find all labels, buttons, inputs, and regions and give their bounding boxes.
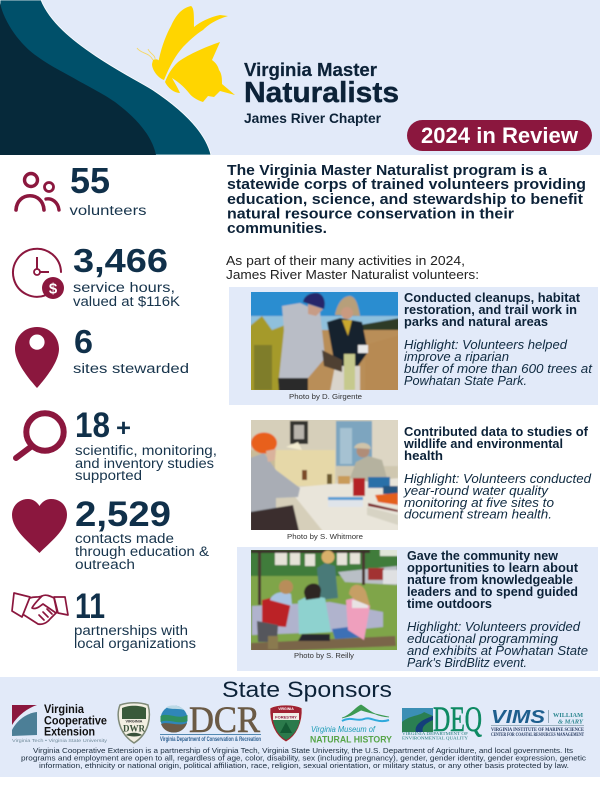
logo: Virginia Cooperative Extension: Extension: [44, 724, 95, 738]
intro paragraph: The Virginia Master Naturalist program is a: [227, 163, 548, 179]
icon: heart: [12, 499, 67, 553]
stat: scientific studies: scientific, monitoring,: [75, 443, 217, 458]
stat: contacts: contacts made: [75, 531, 174, 546]
activities lead-in text: As part of their many activities in 2024,: [226, 254, 465, 268]
highlight: Highlight: Volunteers provided: [407, 619, 581, 634]
logo: Virginia DWR: DWR: [123, 724, 145, 734]
logo: DEQ: DEQ: [433, 699, 482, 739]
highlight: Highlight: Volunteers helped: [404, 337, 568, 352]
stat: scientific studies: and inventory studies: [75, 456, 214, 471]
highlight: [404, 337, 593, 388]
stat: sites stewarded: [15, 323, 189, 388]
logo: VIMS William & Mary: VIMS: [491, 707, 545, 727]
icon: handshake: [12, 593, 68, 624]
photo: children at table: [251, 550, 397, 650]
stat: volunteers: [16, 160, 147, 218]
teal wave: [0, 0, 211, 155]
stat: volunteers: volunteers: [70, 203, 147, 218]
panel: data contribution: [245, 414, 592, 541]
logo: VIMS William & Mary: WILLIAM: [553, 712, 583, 719]
logo: Virginia Forestry: FORESTRY: [275, 714, 297, 720]
heading: Gave the community new: [407, 548, 558, 563]
intro paragraph: education, science, and stewardship to benefit: [227, 192, 583, 208]
stat: scientific studies: supported: [75, 468, 142, 483]
intro paragraph: statewide corps of trained volunteers providing: [227, 177, 586, 193]
activities lead-in text: James River Master Naturalist volunteers:: [226, 268, 479, 282]
subtitle: chapter: James River Chapter: [244, 111, 382, 126]
logo: VIMS William & Mary: & MARY: [558, 718, 584, 726]
stat: sites stewarded: sites stewarded: [73, 361, 189, 376]
highlight: and exhibits at Powhatan State: [407, 643, 588, 658]
highlight: Highlight: Volunteers conducted: [404, 471, 592, 486]
title: Naturalists: Naturalists: [244, 77, 399, 109]
title: Virginia Master: Virginia Master: [244, 60, 377, 80]
header banner: [0, 0, 600, 155]
highlight: [407, 619, 588, 670]
stat: contacts: through education &: [75, 544, 209, 559]
stat: contacts: 2,529: [75, 495, 171, 534]
logo: DEQ: ENVIRONMENTAL QUALITY: [402, 736, 468, 740]
heading: nature from knowledgeable: [407, 572, 573, 587]
stat: scientific studies: +: [116, 415, 131, 442]
highlight: buffer of more than 600 trees at: [404, 361, 593, 376]
logo: VIMS William & Mary: VIRGINIA INSTITUTE OF MARINE SCIENCE: [491, 728, 584, 733]
heading: Conducted cleanups, habitat: [404, 290, 581, 305]
stat: service hours: [13, 242, 180, 309]
panel: community: [237, 544, 598, 671]
photo: tree planting: [251, 292, 398, 390]
activities lead-in text: [226, 254, 479, 282]
highlight: Park's BirdBlitz event.: [407, 655, 527, 670]
disclaimer: information, ethnicity or national origin, political affiliation, race, religion, sexual orientation, or military status, or any other basis protected by law.: [39, 761, 569, 770]
logo: Virginia Cooperative Extension: Virginia Tech • Virginia State University: [12, 738, 108, 744]
intro paragraph: [227, 163, 586, 237]
disclaimer: [21, 746, 586, 770]
panel: cleanups: [229, 286, 598, 405]
stat: scientific studies: 18: [75, 406, 110, 445]
disclaimer: programs and employment are open to all, regardless of age, color, disability, sex (including pregnancy), gender, gender identity, gender expression, genetic: [21, 754, 586, 762]
logo: Virginia DWR: VIRGINIA: [126, 720, 143, 724]
stat: contacts: outreach: [75, 557, 135, 572]
intro paragraph: natural resource conservation in their: [227, 206, 514, 222]
heading: [407, 548, 579, 611]
stat: scientific studies: [16, 406, 217, 483]
highlight: educational programming: [407, 631, 559, 646]
footer: state sponsors: [0, 677, 600, 777]
heading: [404, 290, 581, 329]
heading: leaders and to spend guided: [407, 584, 578, 599]
logo: Virginia Forestry: [270, 705, 302, 742]
heading: parks and natural areas: [404, 314, 548, 329]
heading: restoration, and trail work in: [404, 302, 577, 317]
icon: map pin: [15, 327, 59, 388]
highlight: monitoring at five sites to: [404, 495, 554, 510]
heading: time outdoors: [407, 596, 492, 611]
icon: people: [16, 174, 59, 210]
stat: service hours: valued at $116K: [73, 294, 180, 309]
highlight: document stream health.: [404, 506, 552, 522]
logo: Virginia Cooperative Extension: Cooperative: [44, 714, 107, 728]
logo: DCR: Virginia Department of Conservation & Recreation: [160, 737, 261, 743]
icon: magnifying glass: [16, 413, 64, 458]
stat: sites stewarded: 6: [74, 323, 93, 360]
stat: service hours: 3,466: [73, 242, 168, 279]
dark wave: [0, 3, 156, 155]
logo: Virginia Forestry: VIRGINIA: [278, 707, 294, 711]
logo: Virginia Museum of Natural History: Virginia Museum of: [311, 724, 376, 734]
highlight: year-round water quality: [403, 483, 550, 498]
stat: partnerships: [12, 587, 196, 651]
badge: 2024 in Review: 2024 in Review: [421, 123, 579, 148]
heading: health: [404, 448, 443, 463]
photo: water testing: [251, 420, 398, 530]
logo: Virginia DWR: [118, 703, 149, 743]
logo: DEQ: VIRGINIA DEPARTMENT OF: [402, 731, 469, 736]
logo: DCR: [160, 700, 261, 743]
stat: volunteers: 55: [70, 160, 110, 201]
highlight: [403, 471, 592, 522]
logo: Virginia Cooperative Extension: Virginia: [44, 702, 84, 716]
heading: Contributed data to studies of: [404, 424, 589, 439]
caption: Photo by S. Reilly: [294, 651, 354, 660]
logo: DEQ: [402, 699, 482, 740]
badge: 2024 in Review: [407, 120, 592, 151]
caption: Photo by D. Girgente: [289, 392, 362, 401]
intro paragraph: communities.: [227, 221, 327, 237]
stat: partnerships: 11: [75, 587, 105, 626]
caption: Photo by S. Whitmore: [287, 532, 363, 541]
stat: service hours: service hours,: [73, 280, 175, 295]
disclaimer: Virginia Cooperative Extension is a partnership of Virginia Tech, Virginia State University, the U.S. Department of Agriculture, and local governments. Its: [33, 746, 573, 755]
icon: butterfly: [137, 6, 235, 102]
logo: Virginia Cooperative Extension: [12, 702, 108, 744]
heading: [403, 424, 589, 463]
icon: clock with dollar: $: [49, 280, 58, 298]
logo: Virginia Museum of Natural History: [310, 705, 392, 744]
logo: Virginia Museum of Natural History: NATURAL HISTORY: [310, 734, 392, 744]
stat: contacts: [12, 495, 209, 572]
logo: VIMS William & Mary: [491, 707, 585, 738]
highlight: improve a riparian: [404, 349, 509, 364]
stat: partnerships: local organizations: [74, 636, 196, 651]
heading: opportunities to learn about: [407, 560, 579, 575]
highlight: Powhatan State Park.: [404, 373, 527, 388]
heading: State Sponsors: State Sponsors: [222, 677, 392, 702]
stat: partnerships: partnerships with: [74, 623, 188, 638]
heading: wildlife and environmental: [403, 436, 563, 451]
logo: DCR: DCR: [189, 700, 260, 741]
icon: clock with dollar: [13, 249, 64, 299]
